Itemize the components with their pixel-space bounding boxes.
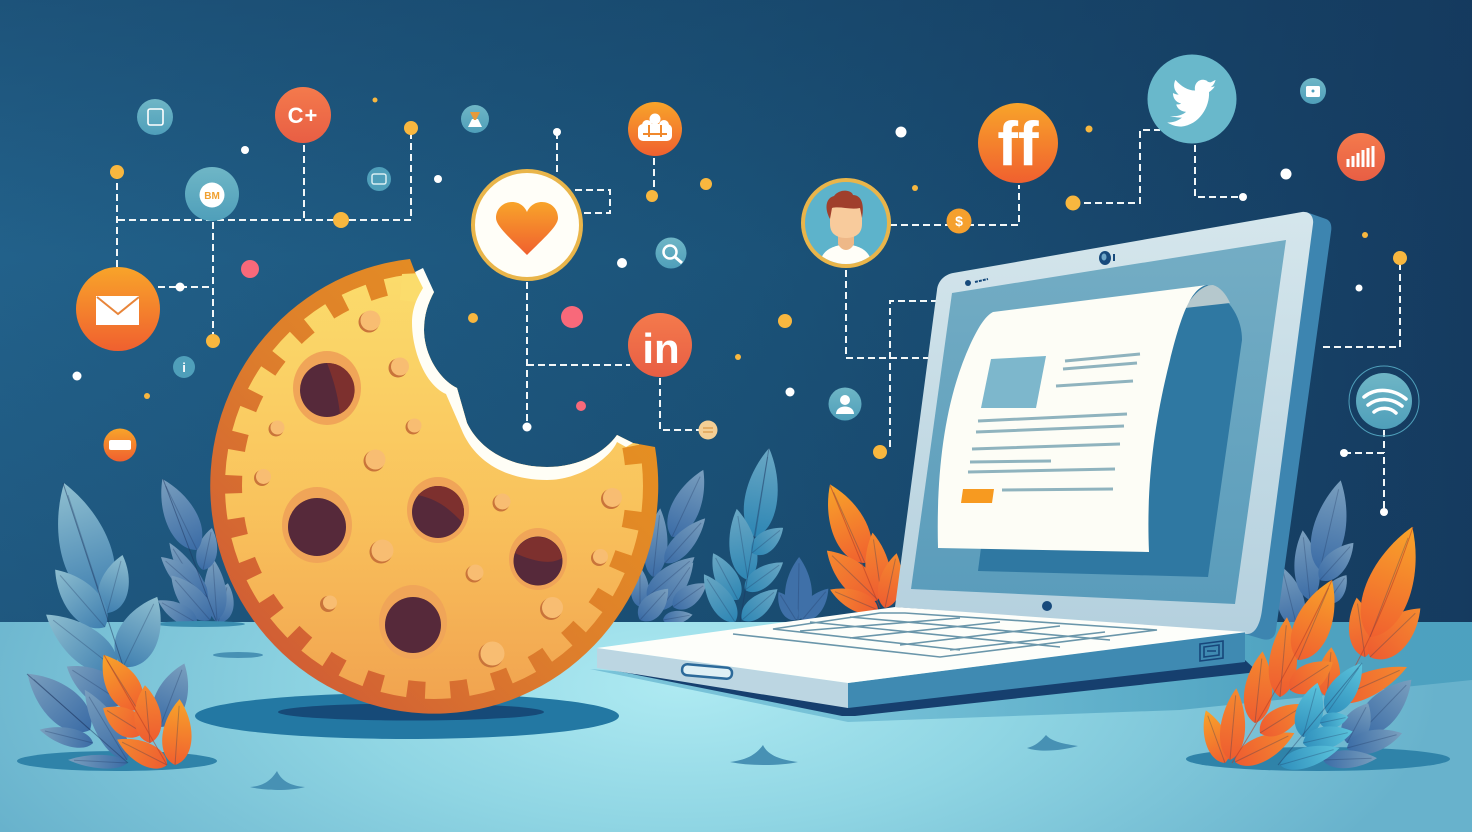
icon: person	[828, 388, 862, 420]
icon: envelope	[76, 267, 160, 351]
icon: info: i	[182, 360, 186, 375]
plant: dark blue left lower	[16, 653, 199, 770]
plant: teal right	[1277, 655, 1373, 775]
laptop: logo	[1042, 601, 1052, 611]
icon: ff orange: ff	[997, 110, 1039, 179]
icon: badge teal	[185, 167, 239, 221]
icon: C plus: C+	[288, 103, 318, 128]
laptop: page curl	[1185, 285, 1230, 308]
laptop: keyboard	[733, 613, 1157, 657]
front left foliage	[16, 476, 199, 775]
laptop: lid back edge	[1245, 212, 1331, 640]
laptop: indicator	[965, 279, 988, 286]
plant: orange tall far right	[1316, 519, 1433, 711]
laptop ground shadow	[590, 622, 1472, 722]
icon: dollar: $	[955, 213, 963, 229]
laptop: camera	[1099, 251, 1115, 265]
icon: peach tag	[698, 420, 718, 440]
cookie shadow	[195, 693, 619, 739]
cookie: bitten edge	[412, 268, 633, 480]
icon: twitter	[1148, 54, 1236, 144]
icon: ff orange	[978, 103, 1058, 183]
plant: blue back right	[1269, 477, 1362, 630]
cookie: chips	[282, 351, 567, 659]
front right foliage	[1195, 519, 1433, 775]
icon: wifi	[1349, 366, 1419, 436]
laptop	[597, 212, 1331, 716]
icon: award	[461, 105, 489, 133]
plant: blue back left	[148, 472, 239, 631]
icon: small chip	[367, 167, 391, 191]
laptop: document	[938, 285, 1207, 552]
icon: search	[656, 238, 686, 268]
laptop: screen	[911, 240, 1286, 604]
ground shadows and mounds	[17, 621, 1450, 790]
cookie: dough	[234, 270, 634, 690]
laptop: right front edge	[848, 632, 1245, 708]
plant: blue behind cookie right	[631, 464, 716, 628]
plant: orange behind laptop	[814, 477, 908, 619]
laptop: bezel	[895, 212, 1313, 634]
cookie: rim	[210, 259, 658, 714]
back foliage	[148, 446, 1362, 631]
laptop: port	[1200, 641, 1223, 661]
icon: linkedin: in	[642, 325, 680, 372]
laptop: document shadow	[978, 285, 1242, 577]
laptop: deck	[597, 607, 1247, 683]
icon: ticket	[104, 428, 136, 462]
icon: info	[173, 356, 195, 378]
plant: small dark blue	[772, 557, 835, 626]
icon: linkedin	[628, 313, 692, 377]
icon: C plus	[275, 87, 331, 143]
icon: small folder	[1300, 78, 1326, 104]
laptop: left front edge	[597, 648, 848, 708]
icon: people group	[628, 102, 682, 156]
cookie	[210, 259, 658, 714]
laptop: slot	[682, 664, 732, 679]
decorative dots	[72, 98, 1407, 516]
ground	[0, 622, 1472, 832]
plant: teal centre	[695, 446, 789, 628]
plant: orange main right	[1195, 573, 1349, 773]
icon: heart	[473, 171, 581, 279]
icon: signal bars	[1337, 133, 1385, 181]
cookie: crumbs	[254, 310, 622, 668]
connector lines	[117, 128, 1400, 512]
plant: orange left	[90, 646, 194, 775]
plant: dark blue right	[1323, 669, 1423, 769]
icon: dollar	[946, 208, 972, 234]
plant: light blue left large	[35, 476, 175, 684]
icon: badge teal: BM	[204, 191, 220, 202]
laptop: navy underside	[597, 660, 1258, 716]
icon: square device	[137, 99, 173, 135]
icon: avatar	[803, 180, 889, 268]
